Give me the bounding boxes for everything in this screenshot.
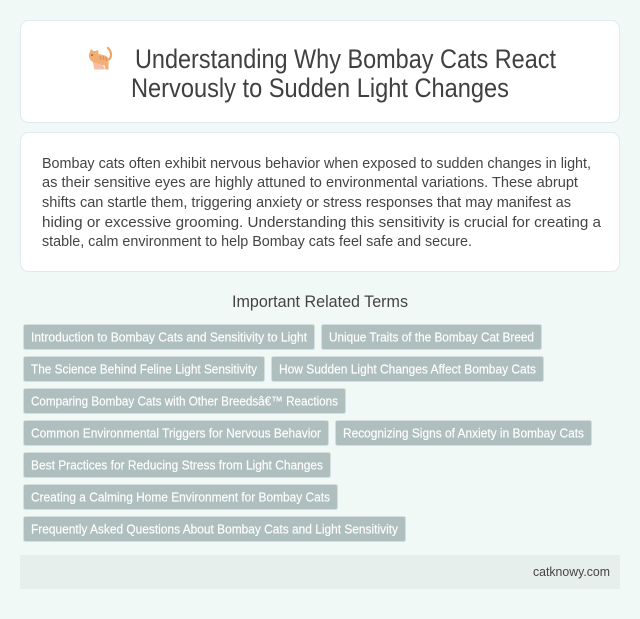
tag: triggers: Common Environmental Triggers for Nervous Behavior xyxy=(31,426,322,440)
description text: shifts can startle them, triggering anxiety or stress responses that may manifest as xyxy=(42,194,571,211)
tag: best practices xyxy=(24,452,330,478)
tag: signs of anxiety xyxy=(336,420,592,446)
title xyxy=(131,44,557,103)
tag: unique traits xyxy=(322,324,542,350)
tag: calming home xyxy=(24,484,338,510)
title: Understanding Why Bombay Cats React xyxy=(135,44,557,74)
tag: comparing breeds: Comparing Bombay Cats with Other Breedsâ€™ Reactions xyxy=(31,394,338,408)
panel: title card xyxy=(20,20,620,122)
tag: faq: Frequently Asked Questions About Bombay Cats and Light Sensitivity xyxy=(31,522,398,536)
panel: description xyxy=(20,132,620,272)
description text xyxy=(42,155,602,250)
tag: sudden light changes xyxy=(272,356,544,382)
tag: science xyxy=(24,356,264,382)
heading: related terms: Important Related Terms xyxy=(232,293,408,311)
footer: catknowy.com xyxy=(533,564,610,579)
icon: cat xyxy=(89,48,111,70)
description text: Bombay cats often exhibit nervous behavior when exposed to sudden changes in light, xyxy=(42,155,591,172)
tag: sudden light changes: How Sudden Light Changes Affect Bombay Cats xyxy=(279,362,536,376)
tag: comparing breeds xyxy=(24,388,346,414)
tag: calming home: Creating a Calming Home Environment for Bombay Cats xyxy=(31,490,330,504)
tag: signs of anxiety: Recognizing Signs of Anxiety in Bombay Cats xyxy=(343,426,584,440)
description text: hiding or excessive grooming. Understanding this sensitivity is crucial for creating a xyxy=(42,214,602,231)
tag: faq xyxy=(24,516,406,542)
title: Nervously to Sudden Light Changes xyxy=(131,73,509,103)
tag: science: The Science Behind Feline Light Sensitivity xyxy=(31,362,257,376)
tag: introduction: Introduction to Bombay Cats and Sensitivity to Light xyxy=(31,330,307,344)
description text: as their sensitive eyes are highly attuned to environmental variations. These abrupt xyxy=(42,174,579,191)
tag: unique traits: Unique Traits of the Bombay Cat Breed xyxy=(329,330,534,344)
description text: stable, calm environment to help Bombay cats feel safe and secure. xyxy=(42,233,472,250)
tag: introduction xyxy=(24,324,314,350)
footer xyxy=(20,555,620,589)
tag: best practices: Best Practices for Reducing Stress from Light Changes xyxy=(31,458,323,472)
tag: triggers xyxy=(24,420,328,446)
